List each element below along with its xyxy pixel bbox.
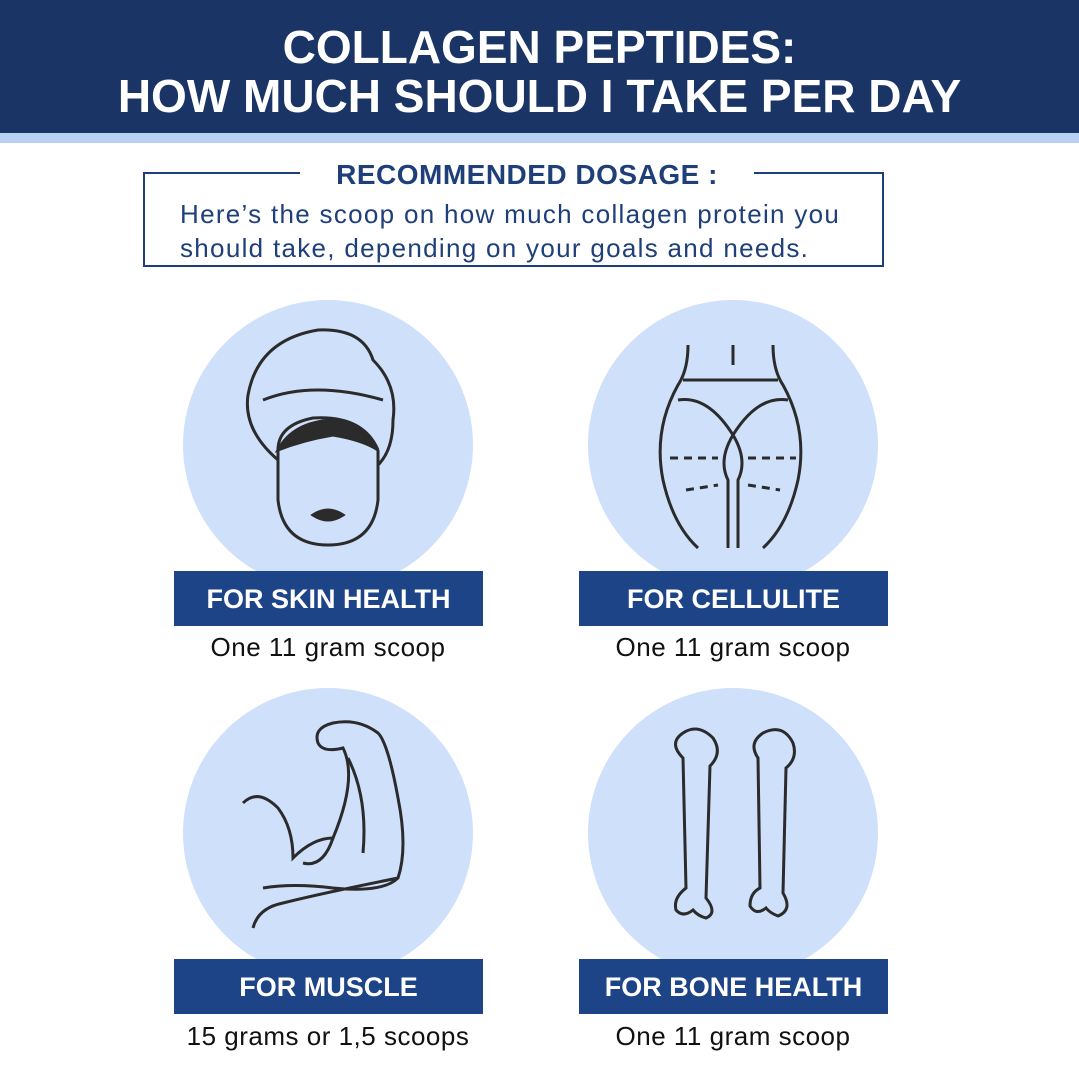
label: bone: FOR BONE HEALTH — [605, 972, 862, 1002]
dosage heading: RECOMMENDED DOSAGE : — [336, 159, 718, 190]
label: muscle: FOR MUSCLE — [239, 972, 418, 1002]
dosage box — [143, 172, 884, 267]
sub: skin: One 11 gram scoop — [211, 632, 445, 662]
title banner: HOW MUCH SHOULD I TAKE PER DAY — [118, 70, 961, 122]
icon: bones — [674, 728, 796, 920]
label: muscle — [174, 959, 483, 1014]
sub: bone: One 11 gram scoop — [616, 1021, 850, 1051]
icon: hips — [658, 345, 802, 550]
circle: skin — [183, 300, 473, 590]
label: skin: FOR SKIN HEALTH — [206, 584, 450, 614]
sub: muscle: 15 grams or 1,5 scoops — [187, 1021, 469, 1051]
icon: arm — [242, 720, 404, 928]
dosage text: Here’s the scoop on how much collagen protein you — [180, 199, 840, 229]
label: skin — [174, 571, 483, 626]
circle: cellulite — [588, 300, 878, 590]
dosage text: should take, depending on your goals and needs. — [180, 233, 809, 263]
circle: muscle — [183, 688, 473, 978]
title banner — [0, 0, 1079, 133]
label: cellulite — [579, 571, 888, 626]
circle: bone — [588, 688, 878, 978]
sub: cellulite: One 11 gram scoop — [616, 632, 850, 662]
title banner: COLLAGEN PEPTIDES: — [283, 21, 796, 73]
dosage text — [180, 199, 840, 263]
label: bone — [579, 959, 888, 1014]
label: cellulite: FOR CELLULITE — [627, 584, 840, 614]
icon: face with towel — [246, 328, 396, 546]
